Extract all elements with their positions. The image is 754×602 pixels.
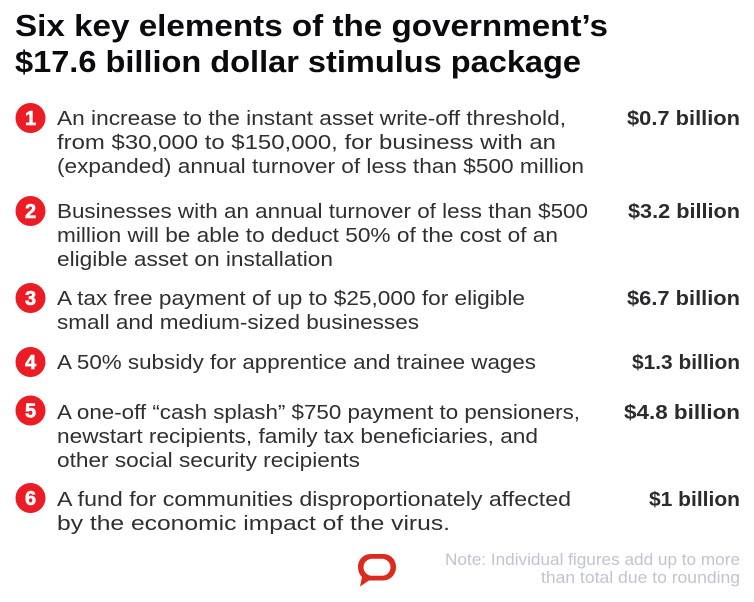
icon: number 3	[16, 283, 46, 313]
icon: number 5: 5	[25, 400, 36, 422]
item 5 description	[57, 401, 580, 472]
icon: number 3: 3	[25, 288, 36, 310]
icon: number 4: 4	[25, 352, 37, 374]
item 1 description	[57, 107, 584, 178]
icon: speech bubble logo	[358, 554, 396, 586]
item 1 amount: $0.7 billion	[627, 108, 740, 130]
icon: number 2	[16, 196, 46, 226]
icon: number 5	[16, 396, 46, 426]
item 1 description: from $30,000 to $150,000, for business with an	[57, 131, 556, 154]
item 5 amount: $4.8 billion	[624, 402, 740, 424]
item 1	[16, 103, 740, 178]
item 6 description: A fund for communities disproportionately affected	[57, 488, 571, 511]
item 6	[16, 483, 740, 535]
icon: number 6	[16, 483, 46, 513]
item 2 description: million will be able to deduct 50% of the cost of an	[57, 224, 558, 247]
note	[445, 551, 740, 587]
item 6 amount: $1 billion	[649, 489, 740, 511]
item 5 description: other social security recipients	[57, 449, 360, 472]
item 4 amount: $1.3 billion	[632, 352, 740, 374]
icon: number 4	[16, 347, 46, 377]
icon: number 2: 2	[25, 201, 36, 223]
item 5 description: A one-off “cash splash” $750 payment to pensioners,	[57, 401, 580, 424]
item 2 description: Businesses with an annual turnover of less than $500	[57, 200, 588, 223]
icon: number 1: 1	[25, 108, 36, 130]
item 1 description: (expanded) annual turnover of less than $500 million	[57, 155, 584, 178]
icon: number 1	[16, 103, 46, 133]
item 3	[16, 283, 740, 334]
item 2 description	[57, 200, 588, 271]
title	[15, 8, 608, 79]
item 4	[16, 347, 740, 377]
item 2 amount: $3.2 billion	[628, 201, 740, 223]
item 6 description: by the economic impact of the virus.	[57, 512, 450, 535]
icon: number 6: 6	[25, 488, 36, 510]
item 2 description: eligible asset on installation	[57, 248, 333, 271]
item 3 amount: $6.7 billion	[627, 288, 740, 310]
note: than total due to rounding	[541, 569, 740, 587]
item 2	[16, 196, 740, 271]
note: Note: Individual figures add up to more	[445, 551, 740, 569]
item 5 description: newstart recipients, family tax beneficiaries, and	[57, 425, 538, 448]
item 3 description	[57, 287, 525, 334]
item 3 description: small and medium-sized businesses	[57, 311, 419, 334]
title: Six key elements of the government’s	[15, 8, 608, 43]
item 3 description: A tax free payment of up to $25,000 for eligible	[57, 287, 525, 310]
item 4 description: A 50% subsidy for apprentice and trainee wages	[57, 351, 536, 374]
item 6 description	[57, 488, 571, 535]
item 5	[16, 396, 740, 472]
title: $17.6 billion dollar stimulus package	[15, 44, 581, 79]
item 1 description: An increase to the instant asset write-off threshold,	[57, 107, 566, 130]
